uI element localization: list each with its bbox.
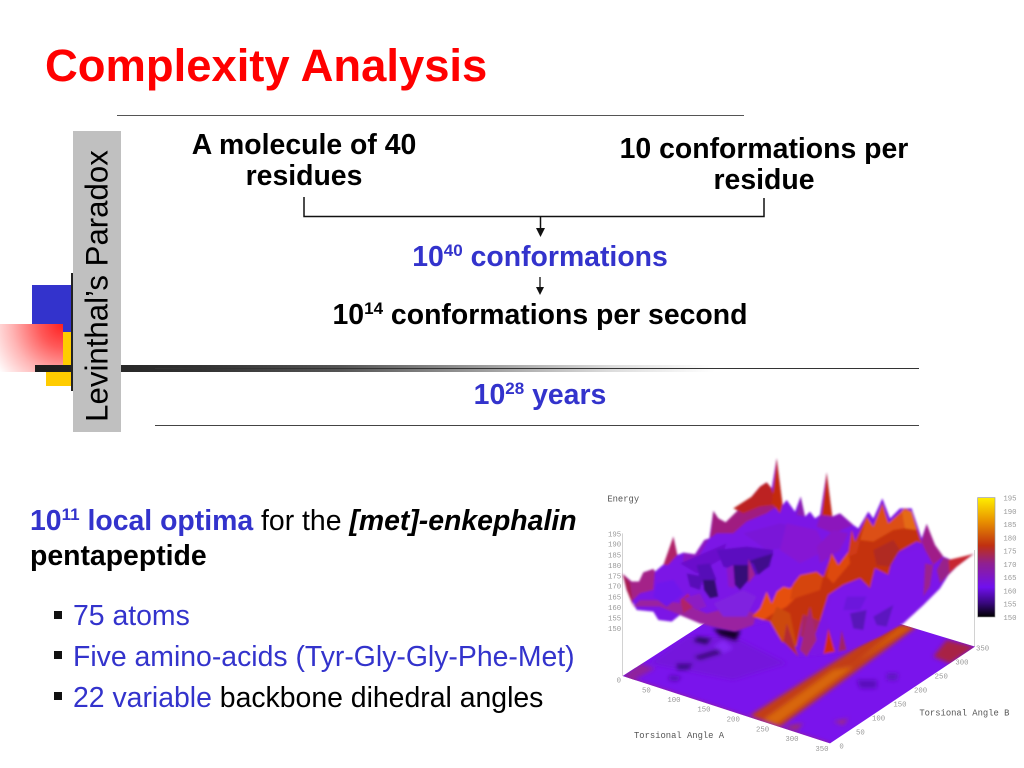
orange ridge main face <box>752 503 922 647</box>
text: 10^28 years: 1028 years <box>474 379 606 411</box>
orange ridge bright crest <box>753 583 797 620</box>
text: molecule of 40 residues: A molecule of 40 <box>192 129 416 161</box>
axis labels: 185 <box>1003 522 1017 530</box>
axis labels: 50 <box>642 687 651 695</box>
back ridge magenta <box>710 482 777 538</box>
axis labels: 155 <box>608 615 621 623</box>
axis labels: 190 <box>1003 509 1017 517</box>
front dark dips <box>850 610 867 630</box>
decoration: yellow square <box>46 332 73 386</box>
title: Complexity Analysis <box>45 40 487 91</box>
axis labels: 165 <box>608 594 621 602</box>
axis labels: 160 <box>1003 588 1017 596</box>
axis labels: 150 <box>697 707 711 715</box>
axis labels: 150 <box>1003 615 1017 623</box>
axis labels: 200 <box>727 717 740 725</box>
decoration: blue square <box>32 285 73 363</box>
axis titles <box>607 494 1009 741</box>
text: molecule of 40 residues <box>192 129 416 192</box>
axis labels: 250 <box>756 727 769 735</box>
bullet list <box>54 600 575 714</box>
interior lighter and darker facets <box>680 543 727 573</box>
axis labels: 165 <box>1003 575 1017 583</box>
text: 10^40 conformations: 1040 conformations <box>412 241 668 273</box>
axis labels: 350 <box>976 646 989 654</box>
axis labels: 250 <box>935 674 948 682</box>
front purple lobe <box>827 548 940 650</box>
chart: 3D energy surface <box>607 458 1017 754</box>
text: local optima: 1011 local optima for the [met]-enkephalin <box>30 505 577 537</box>
axis labels: 150 <box>893 702 907 710</box>
axis labels: 0 <box>617 677 621 685</box>
axis labels: 100 <box>872 716 885 724</box>
floor heatmap <box>623 623 975 747</box>
text: 10 conformations per residue: 10 conformations per <box>620 133 908 165</box>
bracket connector <box>303 197 765 237</box>
axis labels: 180 <box>608 563 621 571</box>
text: 10 conformations per residue: residue <box>714 164 814 196</box>
colour bar <box>978 498 995 617</box>
bullet: amino acids: Five amino-acids (Tyr-Gly-Gly-Phe-Met) <box>73 641 575 673</box>
text: local optima: pentapeptide <box>30 540 207 572</box>
sidebar: Levinthal's Paradox: Levinthal’s Paradox <box>79 150 114 422</box>
axis labels: 170 <box>1003 562 1017 570</box>
axis frame lines <box>623 533 975 676</box>
decoration: horizontal gradient bar <box>35 365 715 372</box>
axis labels: 200 <box>914 688 927 696</box>
floor base <box>623 583 975 743</box>
text: 10^14 conformations per second: 1014 conformations per second <box>333 299 747 331</box>
axis titles: Torsional Angle B <box>919 709 1009 719</box>
axis labels: 0 <box>839 744 844 752</box>
arrow <box>536 277 544 295</box>
axis labels: 160 <box>608 605 621 613</box>
axis labels: 350 <box>815 746 829 754</box>
axis labels <box>608 496 1017 754</box>
axis labels: 300 <box>955 660 969 668</box>
text: molecule of 40 residues: residues <box>246 160 362 192</box>
sidebar: Levinthal's Paradox <box>73 131 121 432</box>
colour bar scale: 195 <box>1003 496 1017 504</box>
axis labels: 175 <box>608 573 621 581</box>
axis labels: 300 <box>785 736 799 744</box>
text: local optima <box>30 505 577 572</box>
axis labels: 155 <box>1003 602 1017 610</box>
axis labels: 175 <box>1003 549 1017 557</box>
decoration: red gradient square <box>0 324 63 372</box>
energy surface <box>623 458 973 657</box>
title rule <box>117 115 744 116</box>
decoration: vertical rule <box>71 273 73 391</box>
axis titles: Torsional Angle A <box>634 731 725 741</box>
bullet: dihedral angles: 22 variable backbone dihedral angles <box>73 682 543 714</box>
axis labels: 170 <box>608 584 621 592</box>
axis labels: 195 <box>608 531 621 539</box>
axis labels: 190 <box>608 542 621 550</box>
axis labels: 180 <box>1003 535 1017 543</box>
front red spikes <box>823 628 835 654</box>
bullet: atoms: 75 atoms <box>73 600 190 632</box>
axis labels: 185 <box>608 552 621 560</box>
axis labels: 150 <box>608 626 621 634</box>
rule below years <box>155 425 919 426</box>
left edge magenta <box>623 569 655 600</box>
rule above years <box>155 368 919 369</box>
text: 10 conformations per residue <box>620 133 908 196</box>
axis titles: Energy <box>607 494 639 504</box>
surface base silhouette <box>623 458 973 657</box>
axis labels: 50 <box>856 730 865 738</box>
axis labels: 100 <box>667 697 681 705</box>
